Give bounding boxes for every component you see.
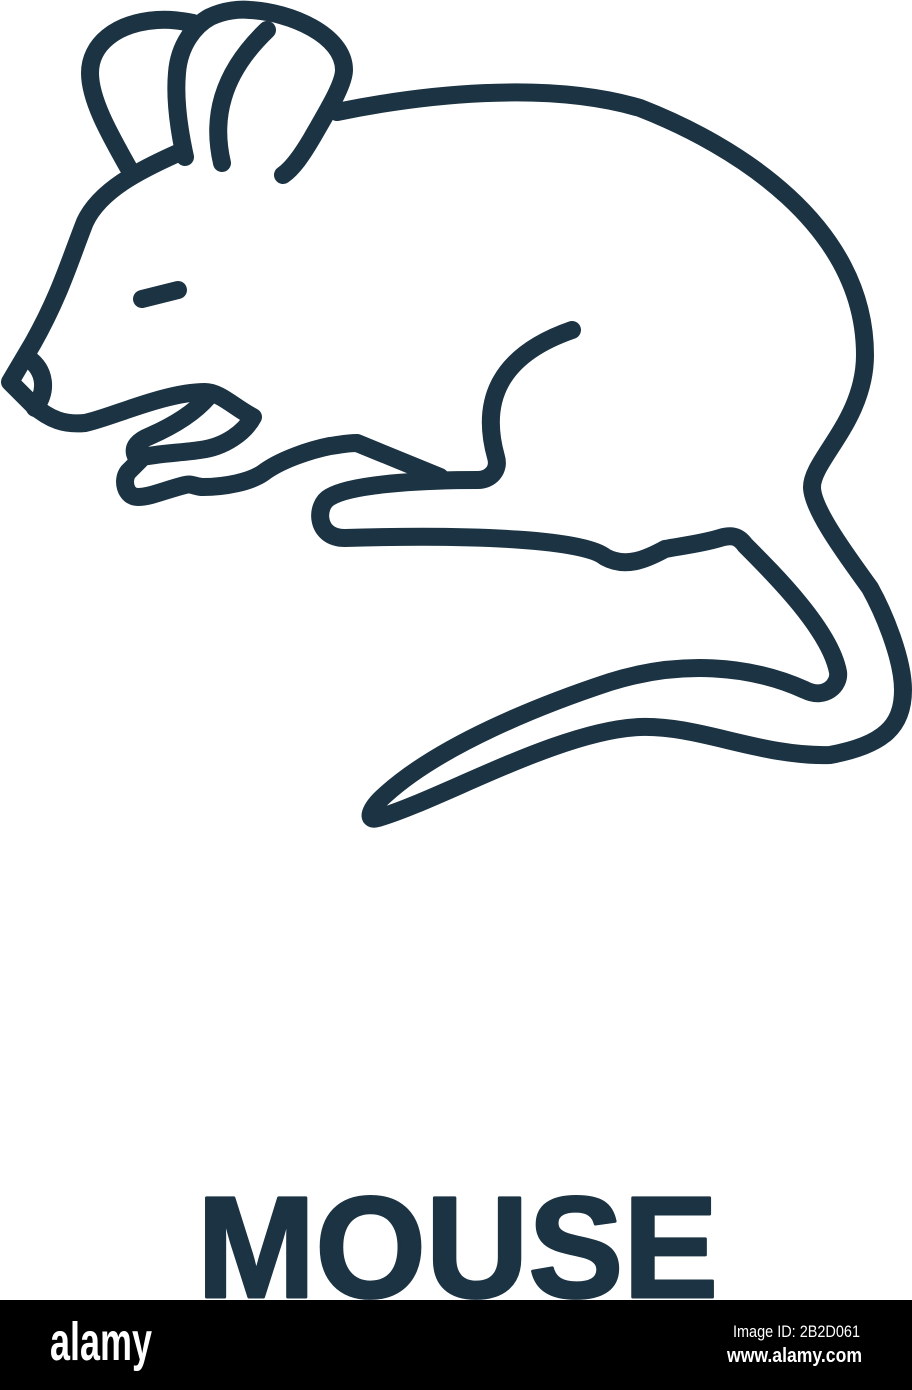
alamy logo: alamy bbox=[50, 1312, 152, 1372]
title: MOUSE bbox=[197, 1167, 718, 1328]
mouse back, hind leg and tail bbox=[320, 92, 903, 819]
mouse eye bbox=[142, 290, 178, 299]
image id: Image ID: 2B2D061 bbox=[733, 1322, 860, 1341]
footer bar bbox=[0, 1300, 912, 1390]
mouse head and front paw bbox=[10, 153, 253, 458]
mouse nose bbox=[28, 358, 43, 408]
mouse left ear bbox=[90, 20, 193, 167]
icon: mouse line drawing bbox=[10, 10, 903, 819]
mouse lower arm and paw bbox=[125, 443, 440, 497]
mouse right ear bbox=[176, 10, 344, 175]
mouse inner ear bbox=[218, 30, 267, 163]
website: www.alamy.com bbox=[726, 1345, 862, 1367]
